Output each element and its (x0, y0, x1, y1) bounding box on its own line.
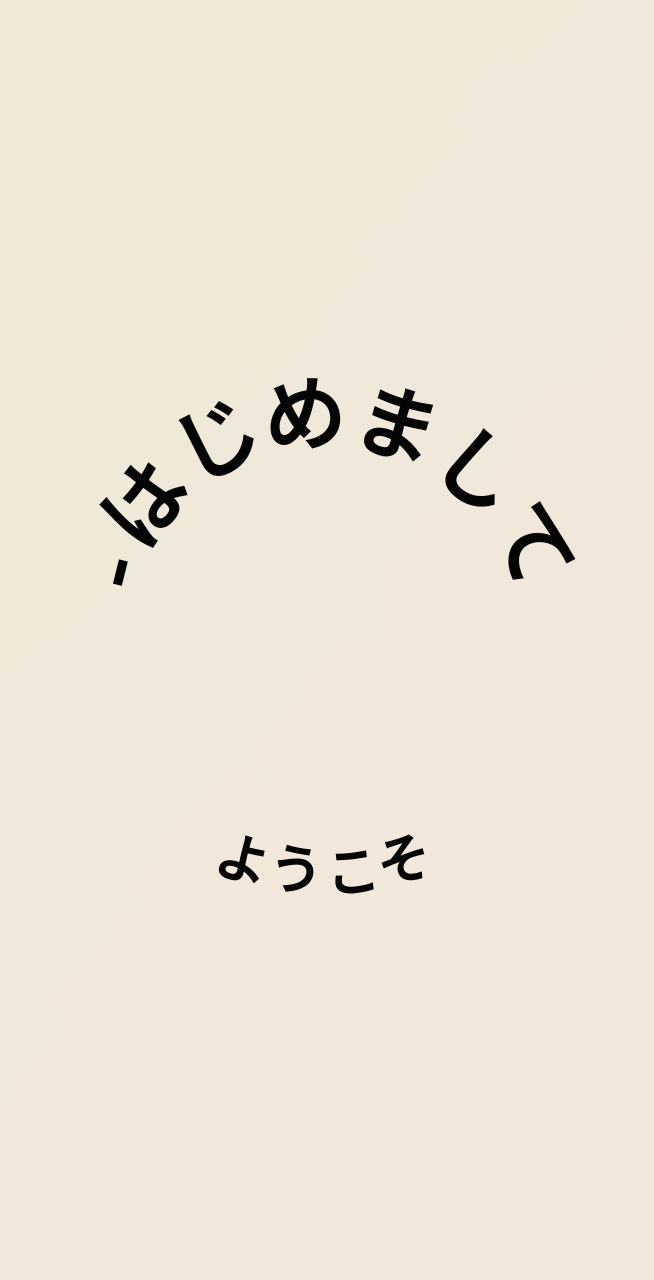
subheading: curved welcome: そ (370, 825, 438, 897)
heading: curved greeting (58, 368, 590, 603)
heading: curved greeting: ま (344, 371, 449, 482)
heading: curved greeting: し (416, 411, 538, 533)
subheading: curved welcome: こ (323, 840, 383, 906)
subheading: curved welcome (209, 825, 438, 906)
subheading: curved welcome: よ (209, 825, 277, 897)
heading: curved greeting: - (58, 542, 169, 599)
heading: curved greeting: め (260, 368, 350, 465)
heading: curved greeting: て (472, 488, 590, 603)
heading: curved greeting: は (85, 445, 207, 565)
heading: curved greeting: じ (160, 382, 275, 501)
subheading: curved welcome: う (266, 839, 325, 903)
